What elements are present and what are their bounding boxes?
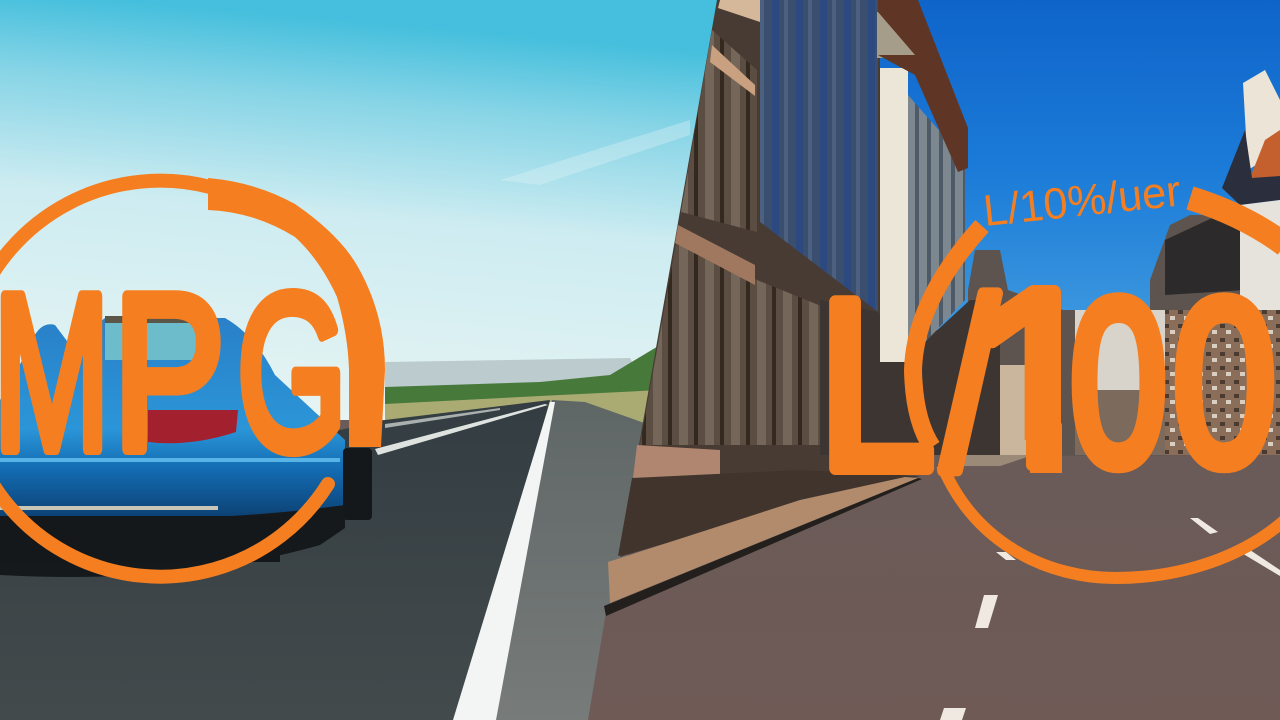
peach upper band bbox=[710, 45, 755, 96]
peach lower band bbox=[675, 225, 755, 285]
white pilaster bbox=[880, 68, 908, 362]
rocker dark bbox=[0, 516, 280, 562]
panel: MPG highway bbox=[0, 0, 720, 720]
ring right arc bbox=[1190, 198, 1280, 245]
white side wall bbox=[1240, 200, 1280, 310]
ornate facade bbox=[1165, 310, 1280, 455]
floor strip bbox=[960, 455, 1030, 466]
sky bbox=[0, 0, 720, 420]
dark lower right bbox=[820, 300, 1000, 455]
stone column bbox=[1000, 365, 1030, 455]
slash: / bbox=[942, 251, 998, 520]
letter G: G bbox=[237, 249, 347, 497]
roof edge bbox=[105, 316, 200, 323]
top corner bbox=[718, 0, 760, 22]
centre dashes bbox=[375, 404, 548, 455]
letter L: L bbox=[818, 251, 935, 520]
digit 1: 1 bbox=[968, 237, 1109, 520]
dark base bbox=[618, 470, 920, 556]
tree line bbox=[385, 345, 660, 404]
far building cluster bbox=[968, 215, 1280, 460]
road surface bbox=[0, 400, 550, 720]
roof shadow band bbox=[1222, 130, 1280, 205]
right building white bbox=[1243, 70, 1280, 170]
distant hills bbox=[385, 358, 650, 395]
cloud streak bbox=[500, 120, 690, 185]
far lane line bbox=[385, 408, 500, 428]
badge: L/100 bbox=[818, 167, 1280, 578]
dash far bbox=[996, 552, 1016, 560]
chrome strip bbox=[0, 506, 218, 510]
dash bottom bbox=[940, 708, 966, 720]
dash right bbox=[1240, 550, 1280, 576]
grass verge bbox=[385, 385, 660, 440]
bumper highlight bbox=[0, 458, 340, 462]
label bbox=[829, 285, 1274, 476]
dash mid bbox=[1190, 518, 1218, 534]
ring left arc bbox=[913, 226, 982, 447]
panel: L/100 city street bbox=[588, 0, 1280, 720]
cornice bbox=[878, 0, 968, 172]
car bbox=[0, 316, 372, 577]
ring heavy arc bbox=[208, 178, 385, 447]
lower facade stripes bbox=[640, 232, 880, 445]
label bbox=[0, 249, 347, 497]
pavement bbox=[608, 477, 918, 603]
grey side facade bbox=[908, 95, 965, 360]
ring lower arc bbox=[942, 465, 1280, 578]
dark side wing bbox=[1165, 205, 1245, 295]
left building base mass bbox=[620, 0, 880, 557]
badge: MPG bbox=[0, 178, 385, 577]
digit 1 stem base bbox=[1026, 420, 1062, 471]
wheel bbox=[343, 448, 372, 520]
bright facade bbox=[1075, 310, 1165, 390]
right building roof bbox=[1250, 130, 1280, 178]
digit 0 first: 0 bbox=[1070, 251, 1167, 515]
capital bbox=[877, 12, 915, 58]
tail light bbox=[148, 410, 238, 443]
car shadow bbox=[0, 505, 345, 577]
pink plinth bbox=[633, 445, 720, 480]
upper brown facade bbox=[681, 30, 757, 232]
ring thin arc bbox=[0, 181, 328, 577]
rear window bbox=[105, 322, 200, 360]
lower arcade bbox=[1075, 390, 1165, 455]
shoulder bbox=[490, 400, 650, 720]
sky bbox=[880, 0, 1280, 330]
letter P: P bbox=[113, 249, 225, 497]
car body bbox=[0, 318, 345, 520]
lane dashes bbox=[940, 518, 1280, 720]
blue facade bbox=[760, 0, 878, 312]
dash near bbox=[975, 595, 998, 628]
kerb shadow bbox=[604, 478, 922, 616]
road bbox=[588, 455, 1280, 720]
edge line bbox=[453, 402, 555, 720]
small curved label: L/10%/uer bbox=[981, 167, 1183, 236]
